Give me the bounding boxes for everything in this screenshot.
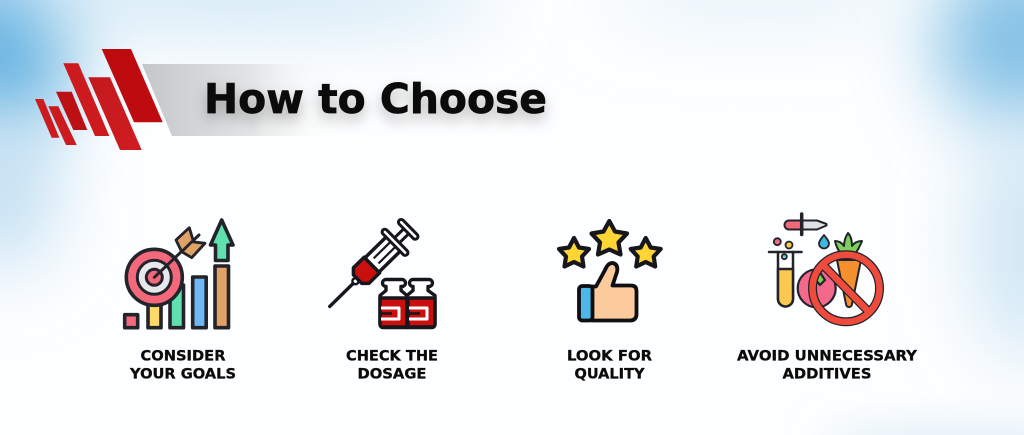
title: How to Choose: [204, 75, 547, 123]
prohibition sign: [812, 255, 880, 322]
label: avoid unnecessary additives: AVOID UNNECESSARY: [737, 348, 918, 364]
icon: syringe: [320, 219, 418, 317]
icon: goals chart and target: [125, 220, 233, 328]
test tube: [769, 252, 802, 306]
label: look for quality: [567, 348, 652, 382]
logo: red bars: [35, 49, 163, 150]
icon: additives crossed out: [769, 214, 880, 322]
label: avoid unnecessary additives: [737, 348, 918, 382]
label: check the dosage: DOSAGE: [358, 366, 426, 382]
tomato: [798, 269, 836, 307]
icon: three stars: [559, 221, 661, 266]
label: check the dosage: [346, 348, 438, 382]
label: consider your goals: CONSIDER: [140, 348, 226, 364]
carrot: [835, 233, 862, 307]
icon: vials: [380, 280, 435, 328]
label: look for quality: LOOK FOR: [567, 348, 652, 364]
title banner: [142, 64, 345, 136]
label: avoid unnecessary additives: ADDITIVES: [782, 366, 872, 382]
label: consider your goals: YOUR GOALS: [129, 366, 236, 382]
bubbles and drop: [774, 235, 829, 259]
dropper: [784, 214, 826, 234]
label: look for quality: QUALITY: [574, 366, 645, 382]
label: check the dosage: CHECK THE: [346, 348, 438, 364]
label: consider your goals: [129, 348, 236, 382]
icon: thumbs up: [579, 263, 636, 320]
